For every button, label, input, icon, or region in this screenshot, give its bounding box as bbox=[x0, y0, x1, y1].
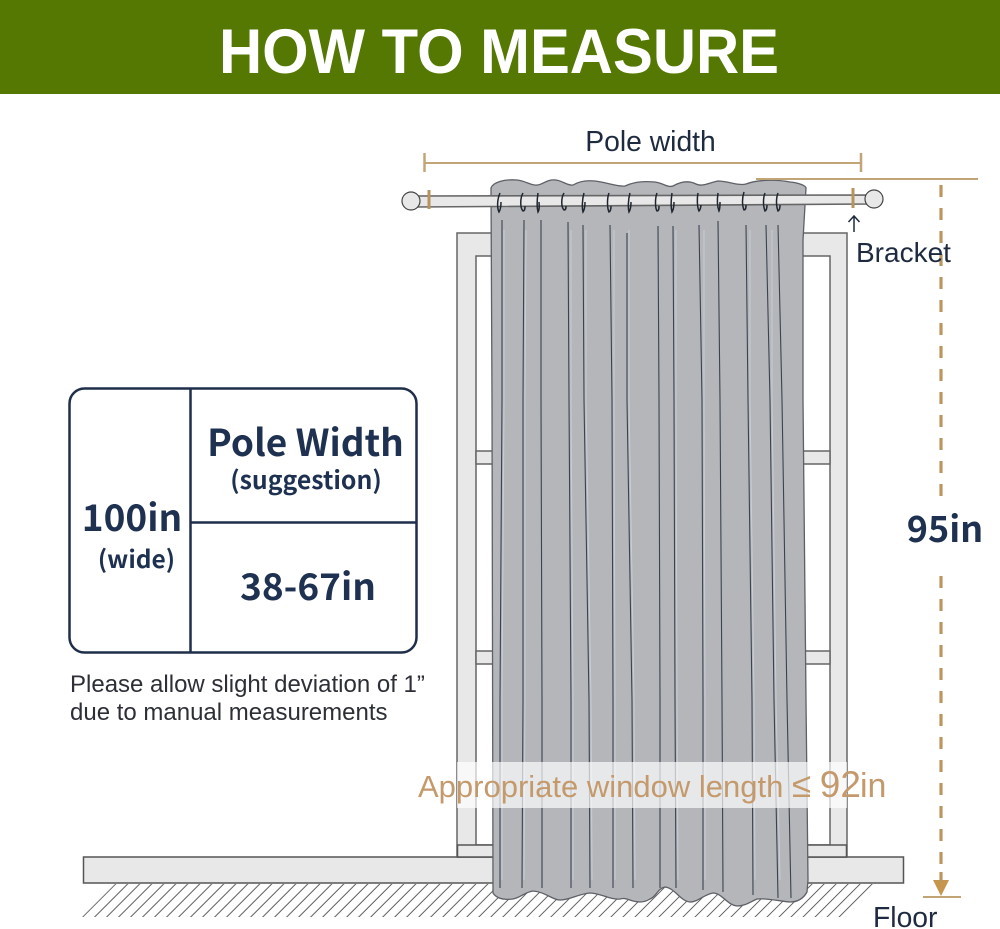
floor slab bbox=[84, 857, 904, 883]
bracket label: Bracket bbox=[856, 237, 951, 268]
curtain panel bbox=[491, 180, 808, 906]
window frame bbox=[457, 233, 847, 857]
pole width dimension line bbox=[424, 153, 861, 172]
pole width heading: Pole Width bbox=[207, 413, 404, 467]
width value: 100in bbox=[82, 488, 182, 542]
bracket marks bbox=[429, 188, 853, 209]
height dimension bbox=[756, 179, 978, 897]
pole width value: 38-67in bbox=[240, 557, 376, 611]
deviation note: Please allow slight deviation of 1” bbox=[70, 671, 425, 698]
bracket arrow bbox=[848, 216, 860, 232]
curtain fold highlights bbox=[502, 230, 780, 880]
title: HOW TO MEASURE bbox=[219, 17, 779, 87]
floor line bbox=[923, 896, 961, 898]
arrow head bbox=[933, 880, 949, 896]
curtain rod bbox=[402, 190, 883, 210]
left finial bbox=[402, 192, 420, 210]
curtain fold lines bbox=[500, 220, 791, 898]
right finial bbox=[865, 190, 883, 208]
floor hatching bbox=[82, 884, 882, 917]
deviation note: due to manual measurements bbox=[70, 699, 388, 726]
dashed height line bbox=[939, 185, 943, 870]
suggestion caption: (suggestion) bbox=[230, 461, 382, 497]
top reference line bbox=[756, 178, 978, 180]
table outline bbox=[70, 388, 416, 652]
size table bbox=[70, 388, 416, 653]
pole width label: Pole width bbox=[585, 125, 716, 157]
window length band bbox=[457, 762, 847, 808]
height label: 95in bbox=[907, 501, 983, 553]
window length label: Appropriate window length ≤ 92in bbox=[418, 764, 886, 805]
header banner bbox=[0, 0, 1000, 94]
wide caption: (wide) bbox=[98, 541, 175, 576]
curtain rings bbox=[498, 192, 780, 212]
